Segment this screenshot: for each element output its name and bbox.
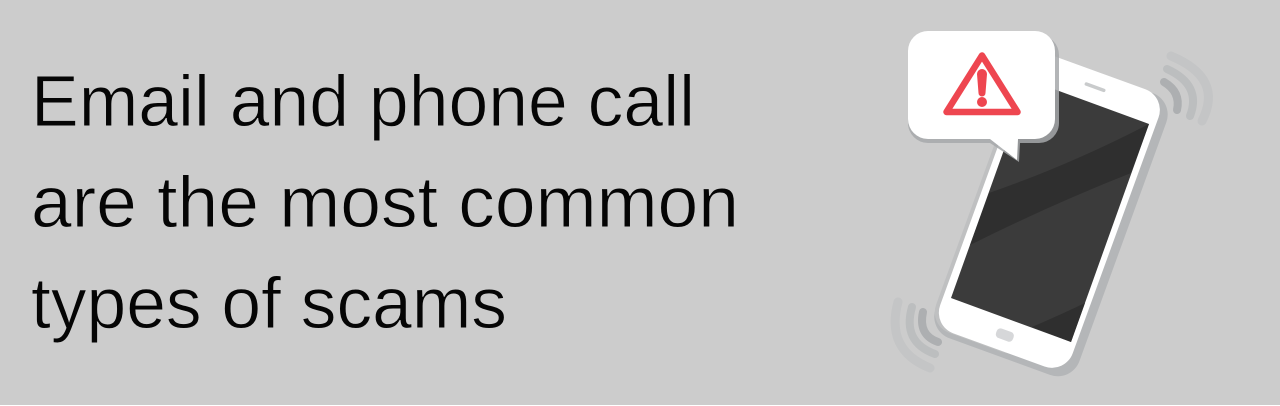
phone shadow [928, 48, 1174, 383]
exclamation dot [977, 97, 987, 107]
icon: smartphone [928, 47, 1174, 383]
screen diagonal band bottom [1032, 303, 1085, 342]
icon: warning triangle [946, 56, 1018, 112]
home button [995, 327, 1015, 343]
icon: vibration waves bottom left [895, 302, 938, 368]
earpiece [1084, 82, 1106, 93]
heading line 2: are the most common [31, 163, 739, 243]
icon: vibration waves top right [1164, 56, 1208, 121]
triangle outline [946, 56, 1018, 112]
heading line 3: types of scams [31, 264, 507, 344]
bubble shadow [908, 35, 1059, 162]
icon: speech bubble [908, 31, 1059, 162]
bubble body [908, 31, 1055, 160]
screen diagonal band middle [970, 124, 1149, 245]
phone screen [951, 80, 1149, 342]
phone left edge highlight [929, 47, 1124, 360]
heading line 1: Email and phone call [31, 62, 695, 142]
exclamation bar [977, 69, 987, 97]
phone body [933, 49, 1166, 374]
heading [31, 62, 739, 344]
